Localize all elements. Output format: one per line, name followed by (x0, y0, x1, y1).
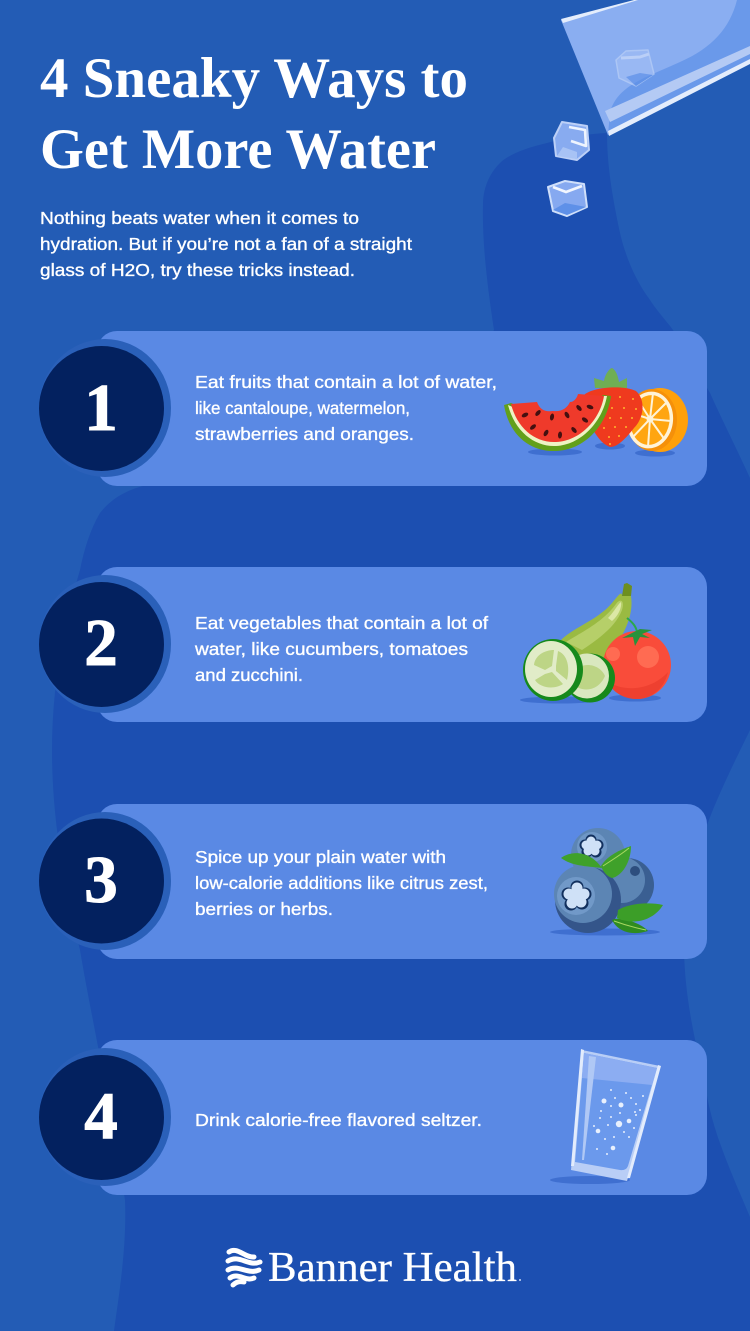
panel: step 2 (39, 567, 707, 722)
panel: step 4 (39, 1040, 707, 1195)
icon: ice cube lower (548, 181, 587, 216)
orange (623, 388, 688, 452)
panel: step 3 (39, 804, 707, 959)
title (40, 47, 468, 181)
step 2 text: Eat vegetables that contain a lot of (195, 613, 488, 633)
logo: Banner Health: Banner Health (268, 1245, 517, 1291)
intro text: Nothing beats water when it comes to (40, 208, 359, 228)
step 3 text: berries or herbs. (195, 899, 333, 919)
zucchini (560, 583, 632, 668)
step 4 text: Drink calorie-free flavored seltzer. (195, 1110, 482, 1130)
icon: tilted glass pouring (561, 0, 750, 136)
title: 4 Sneaky Ways to (40, 47, 468, 110)
step 1 text (195, 372, 497, 444)
intro text: glass of H2O, try these tricks instead. (40, 260, 355, 280)
number badge 2: 2 (84, 606, 118, 680)
leaves (561, 846, 663, 933)
icon: fruits (504, 368, 688, 456)
title: Get More Water (40, 118, 436, 181)
icon: flag waves (228, 1250, 260, 1285)
number badge 4 (39, 1048, 171, 1186)
tomato (603, 618, 671, 699)
step 3 text: Spice up your plain water with (195, 847, 446, 867)
intro text: hydration. But if you’re not a fan of a straight (40, 234, 412, 254)
cucumber slice front (523, 639, 583, 701)
number badge 3: 3 (84, 843, 118, 917)
icon: ice cube in glass (616, 50, 654, 86)
step 1 text: Eat fruits that contain a lot of water, (195, 372, 497, 392)
icon: ice cube upper (554, 122, 589, 160)
panel: step 1 (39, 331, 707, 486)
watermelon (504, 394, 611, 451)
strawberry (582, 368, 643, 447)
icon: blueberries (550, 828, 663, 936)
icon: glass of seltzer (550, 1049, 661, 1184)
number badge 2 (39, 575, 171, 713)
number badge 1 (39, 339, 171, 477)
step 3 text: low-calorie additions like citrus zest, (195, 873, 488, 893)
step 1 text: strawberries and oranges. (195, 424, 414, 444)
step 2 text: water, like cucumbers, tomatoes (194, 639, 468, 659)
step 1 text: like cantaloupe, watermelon, (195, 398, 410, 418)
icon: vegetables (520, 583, 671, 704)
step 3 text (195, 847, 488, 919)
number badge 1: 1 (84, 371, 118, 445)
step 2 text (194, 613, 488, 685)
cucumber slice back (565, 654, 615, 702)
number badge 3 (39, 812, 171, 950)
number badge 4: 4 (84, 1079, 118, 1153)
intro text (40, 208, 412, 280)
step 2 text: and zucchini. (195, 665, 303, 685)
